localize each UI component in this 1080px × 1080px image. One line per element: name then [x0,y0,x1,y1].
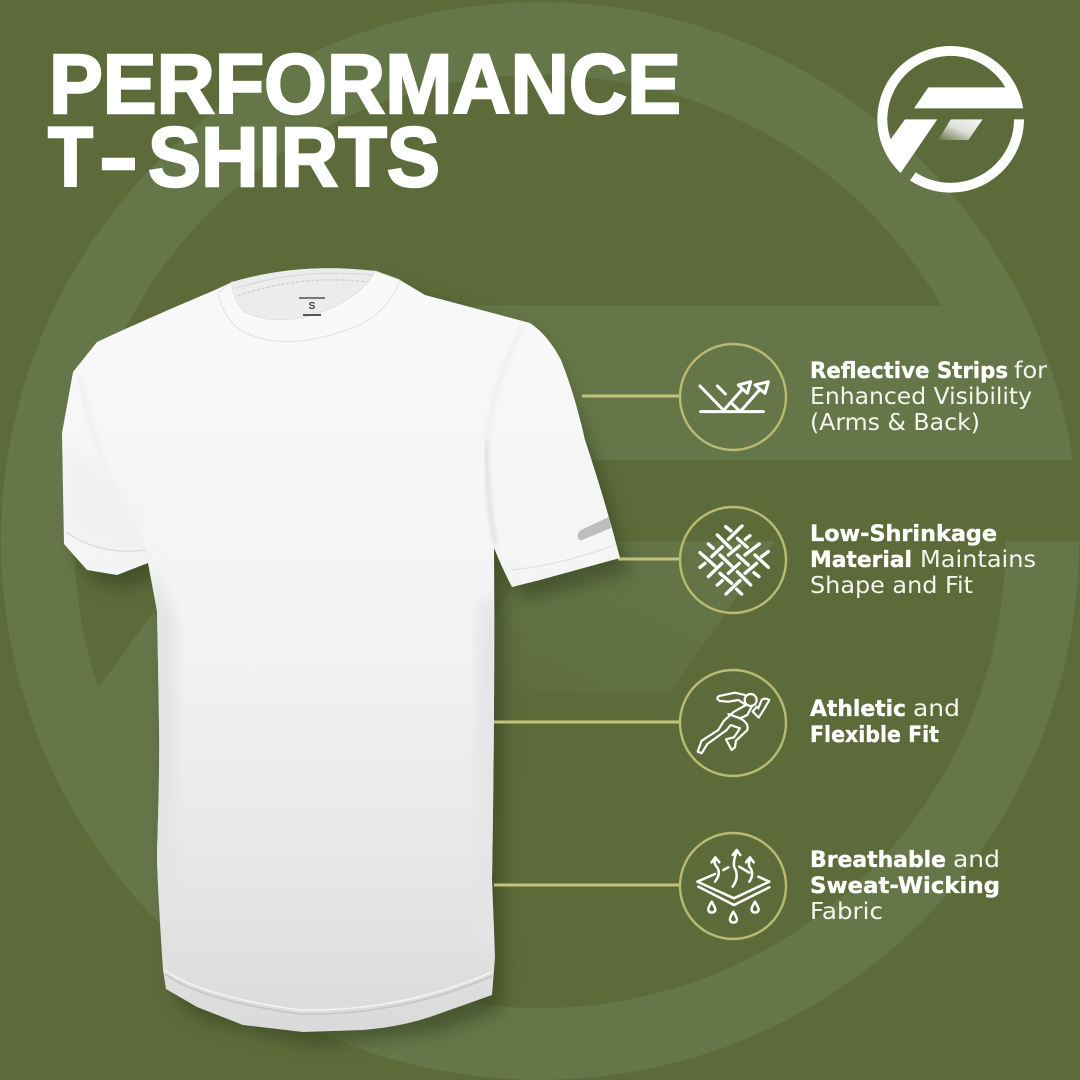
icon: reflective strips [680,344,786,450]
title: T [48,110,93,204]
icon: woven fabric [680,507,786,613]
text: low-shrinkage: Low-Shrinkage [810,522,997,547]
text: low-shrinkage: Material [810,548,912,573]
collar band [218,271,400,342]
t-shirt [62,268,620,1032]
text: reflective strips: (Arms & Back) [810,410,980,436]
text: breathable [810,847,1000,925]
reflective strip [578,517,611,540]
connector lines [494,396,680,885]
feature: reflective strips [680,344,1048,450]
title: - [99,110,138,204]
title [48,37,681,204]
feature: athletic fit [680,670,960,776]
brand logo [877,46,1024,193]
text: breathable: Breathable [810,848,946,873]
collar inside [232,268,375,320]
text: athletic fit [810,696,960,748]
title: PERFORMANCE [49,37,681,131]
icon: breathable fabric [680,833,786,939]
text: low-shrinkage [810,522,1036,599]
shirt body [62,268,620,1032]
text: athletic fit: and [913,696,960,722]
neck label [299,297,325,316]
shirt shading [62,325,615,1014]
text: reflective strips: Reflective Strips [810,359,1008,384]
text: athletic fit: Flexible Fit [810,723,939,748]
text: low-shrinkage: Shape and Fit [810,573,973,599]
feature: breathable [680,833,1000,939]
text: breathable: and [953,847,1000,873]
text: breathable: Sweat-Wicking [810,874,1000,899]
text: breathable: Fabric [810,899,883,925]
text: reflective strips [810,358,1048,436]
neck label: S [309,301,316,312]
title: SHIRTS [148,110,440,204]
feature: low-shrinkage [680,507,1036,613]
text: low-shrinkage: Maintains [920,547,1036,573]
shirt shadow [74,285,630,1046]
icon: runner [680,670,786,776]
text: athletic fit: Athletic [810,697,906,722]
text: reflective strips: for [1014,358,1048,384]
text: reflective strips: Enhanced Visibility [810,384,1032,410]
